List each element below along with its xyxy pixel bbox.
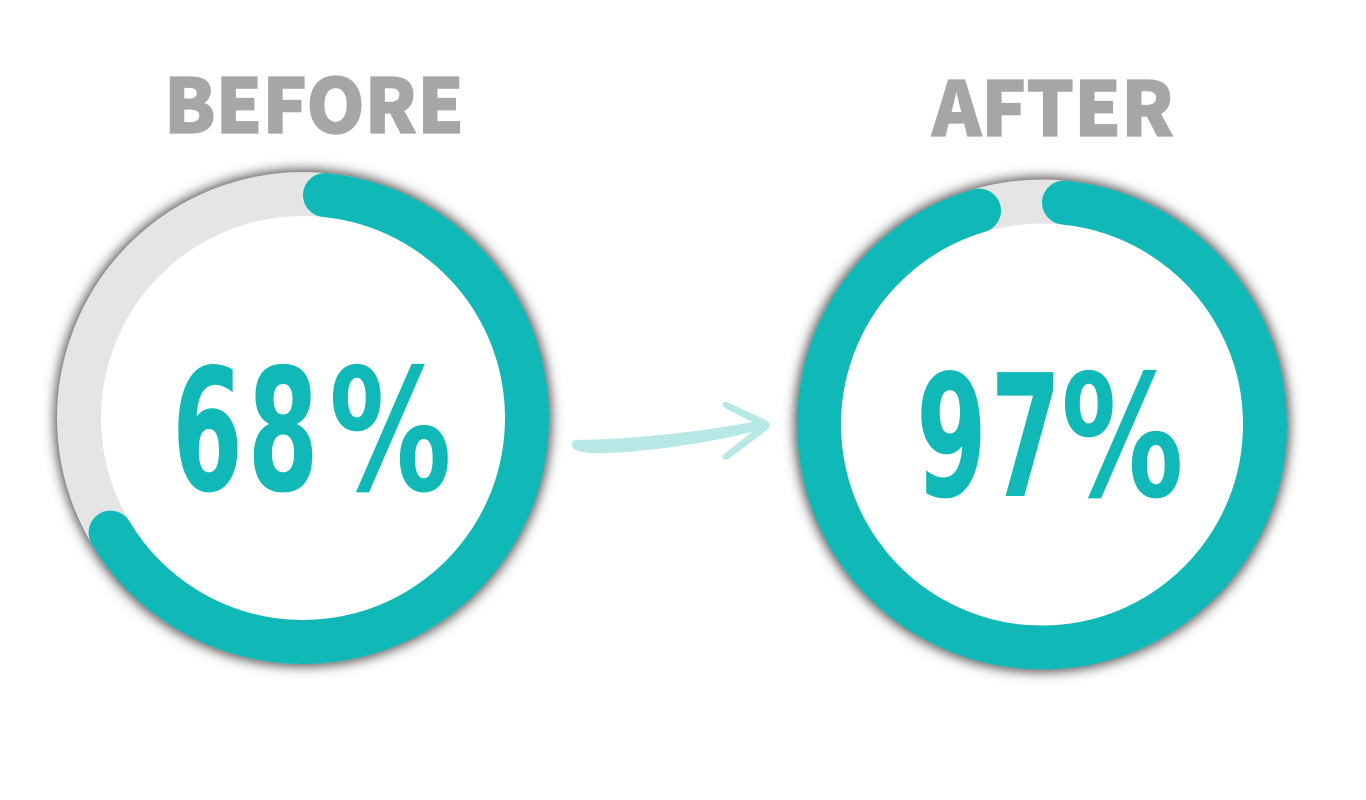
heading: before: BEFORE (164, 46, 464, 155)
donut chart: before 68% (55, 170, 551, 666)
ring track (819, 202, 1265, 648)
value: 68%: 68 (172, 334, 319, 531)
value: 68% (172, 333, 452, 531)
donut chart: after 97% (795, 178, 1289, 672)
value: 68%: % (329, 333, 452, 530)
value: 97%: 97 (916, 340, 1061, 537)
arrow (572, 402, 770, 460)
value: 97%: % (1061, 339, 1184, 536)
ring track (79, 194, 527, 642)
heading: after: AFTER (931, 49, 1174, 158)
value: 97% (916, 339, 1184, 537)
ring progress arc (111, 195, 527, 642)
ring shadow (55, 170, 551, 666)
ring progress arc (819, 203, 1265, 648)
ring shadow (795, 178, 1289, 672)
